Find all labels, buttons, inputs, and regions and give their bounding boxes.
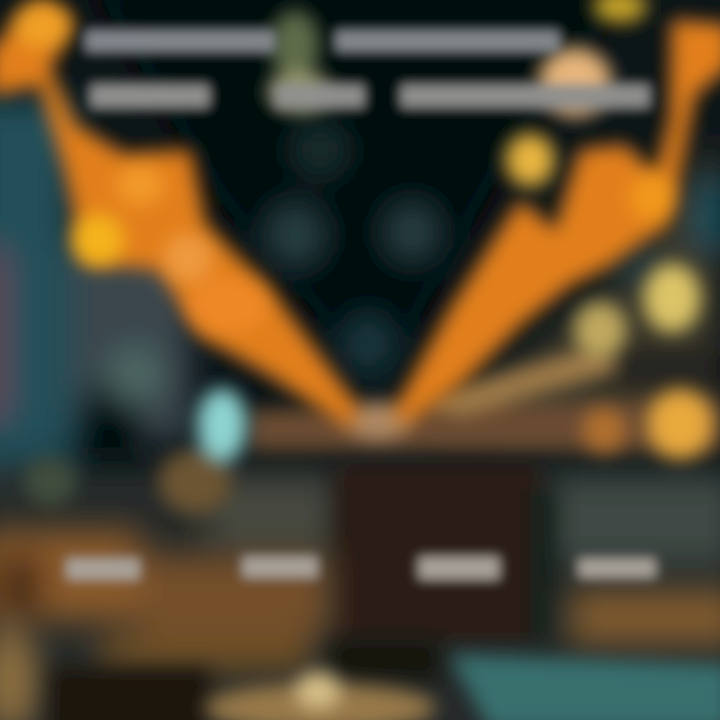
panel: teal counter: [450, 655, 720, 720]
panel: central dark triangle: [90, 0, 640, 385]
panel: lower dark floor: [50, 640, 440, 720]
panel: dark central cabinet: [335, 465, 555, 640]
panel: lower room: [0, 465, 720, 720]
label bars: four illegible captions: [66, 556, 656, 580]
right orange zigzag banner: [392, 20, 720, 425]
horizon glow: [250, 345, 720, 450]
left orange zigzag banner: [0, 0, 360, 428]
panel: right wall with shelves: [430, 130, 720, 440]
title: illegible blurred heading, line 1: [85, 30, 560, 52]
title: illegible blurred heading, line 2: [90, 84, 650, 108]
panel: golden foreground object: [205, 672, 435, 720]
panel: wooden tables: [0, 530, 720, 720]
panel: left teal wall: [0, 100, 190, 520]
hanging lights: [14, 0, 712, 514]
